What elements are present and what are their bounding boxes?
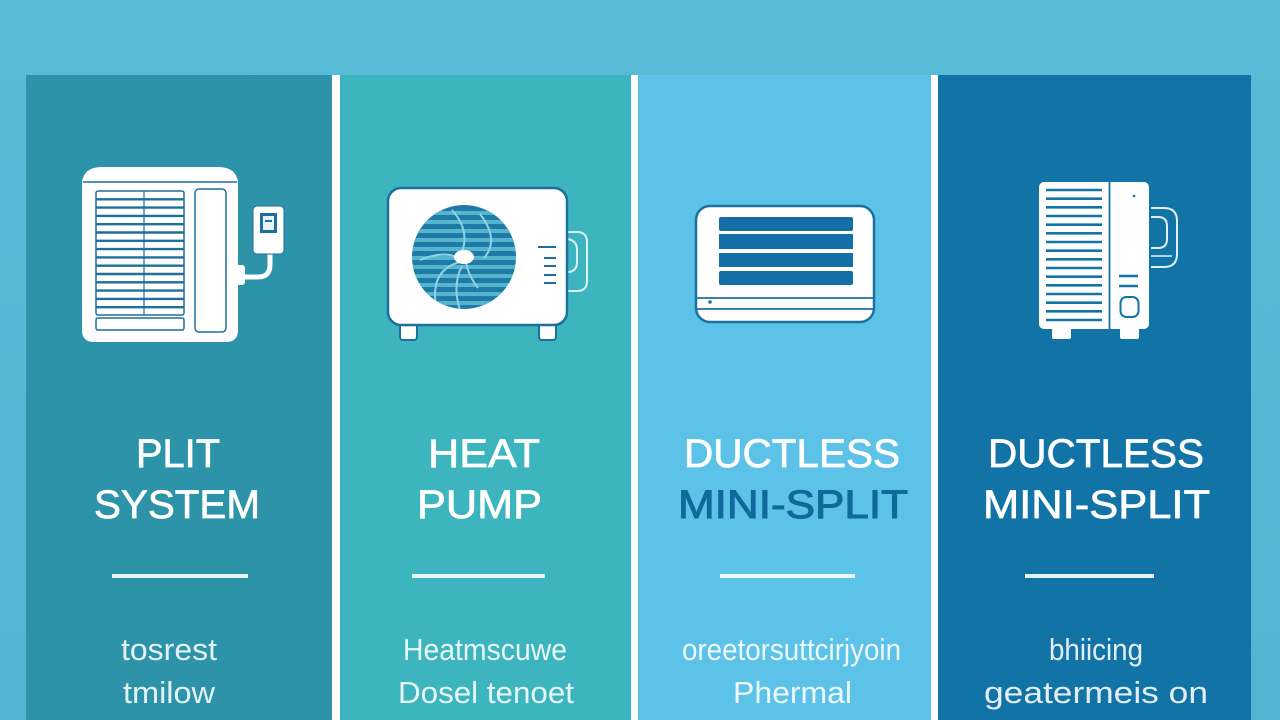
title: split system: SYSTEM — [94, 483, 260, 527]
description: ductless mini-split, dark: bhiicing — [1049, 632, 1143, 667]
title: ductless mini-split: DUCTLESS — [684, 432, 900, 476]
description: ductless mini-split: oreetorsuttcirjyoin — [682, 632, 901, 667]
panel: heat pump — [340, 75, 631, 720]
panel: ductless mini-split — [638, 75, 931, 720]
icon: tall condenser unit — [1039, 182, 1177, 339]
icon: wall-mounted indoor unit — [696, 206, 874, 322]
title: heat pump: PUMP — [417, 483, 542, 527]
description: ductless mini-split: Phermal — [733, 675, 852, 710]
title: split system — [94, 432, 260, 527]
description: heat pump: Heatmscuwe — [403, 632, 567, 667]
panel: ductless mini-split, dark — [938, 75, 1251, 720]
icon: outdoor unit with remote — [82, 167, 284, 342]
description: heat pump: Dosel tenoet — [398, 675, 574, 710]
title: ductless mini-split — [678, 432, 908, 527]
title: ductless mini-split: MINI-SPLIT — [983, 483, 1210, 527]
description: ductless mini-split — [682, 632, 901, 710]
icon: heat pump unit with fan — [388, 188, 587, 340]
title: split system: PLIT — [136, 432, 220, 476]
title: ductless mini-split — [983, 432, 1210, 527]
description: split system: tosrest — [121, 632, 217, 667]
description: ductless mini-split, dark — [984, 632, 1208, 710]
description: ductless mini-split, dark: geatermeis on — [984, 675, 1208, 710]
description: split system — [121, 632, 217, 710]
description: heat pump — [398, 632, 574, 710]
title: ductless mini-split: MINI-SPLIT — [678, 483, 908, 527]
description: split system: tmilow — [123, 675, 216, 710]
panel: split system — [26, 75, 332, 720]
title: heat pump — [417, 432, 542, 527]
title: ductless mini-split: DUCTLESS — [988, 432, 1204, 476]
title: heat pump: HEAT — [428, 432, 540, 476]
